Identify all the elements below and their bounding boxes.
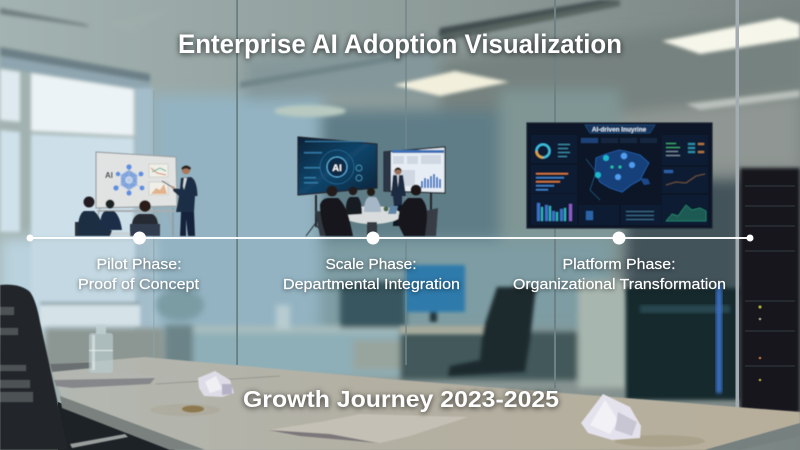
crumbs on table bbox=[150, 404, 220, 416]
table top bbox=[50, 357, 800, 450]
back room furniture bbox=[45, 280, 626, 388]
standing presenter bbox=[391, 167, 406, 226]
timeline bbox=[26, 232, 754, 244]
timeline line bbox=[30, 237, 750, 239]
phase illustration: pilot phase whiteboard presentation bbox=[75, 152, 198, 236]
milestone: platform bbox=[612, 232, 626, 244]
glass wall colour fields bbox=[0, 10, 800, 348]
dashboard bars bbox=[421, 174, 441, 188]
dashboard header bbox=[585, 125, 655, 134]
title: Enterprise AI Adoption Visualization bbox=[178, 29, 622, 59]
floor under table bbox=[58, 402, 175, 450]
crumpled paper right bbox=[581, 394, 705, 447]
phase illustration: scale phase meeting room bbox=[298, 137, 445, 236]
audience bbox=[75, 196, 160, 236]
presenter bbox=[162, 166, 198, 236]
whiteboard: AI bbox=[105, 171, 113, 180]
AI hub diagram bbox=[113, 164, 144, 196]
table front edge bbox=[60, 396, 205, 450]
label: platform phase bbox=[513, 256, 726, 293]
right dashboard screen bbox=[384, 147, 445, 227]
server racks bbox=[626, 168, 800, 413]
footer title: Growth Journey 2023-2025 bbox=[243, 386, 559, 412]
label: pilot phase: Proof of Concept bbox=[78, 276, 200, 293]
left AI screen bbox=[298, 137, 377, 236]
glass bottle bbox=[89, 325, 113, 373]
dashboard central map bbox=[579, 138, 661, 225]
milestone: pilot bbox=[133, 232, 146, 244]
dashboard header: AI-driven Inuyrine bbox=[592, 126, 647, 134]
office chair bbox=[0, 285, 128, 450]
paper sheets bbox=[268, 414, 468, 443]
label: pilot phase: Pilot Phase: bbox=[96, 256, 182, 273]
label: scale phase bbox=[283, 256, 460, 293]
dashboard left panels bbox=[531, 135, 577, 225]
seated people bbox=[327, 186, 337, 196]
dashboard screen frame bbox=[527, 123, 712, 228]
start dot bbox=[26, 234, 34, 242]
conference table foreground bbox=[0, 285, 800, 450]
label: scale phase: Scale Phase: bbox=[326, 256, 416, 273]
milestone: scale bbox=[366, 232, 380, 244]
board charts bbox=[149, 164, 168, 195]
conference table and team bbox=[315, 185, 438, 236]
end dot bbox=[746, 234, 754, 242]
crumpled paper left bbox=[198, 371, 234, 397]
laptop and notebook bbox=[50, 362, 280, 388]
label: scale phase: Departmental Integration bbox=[283, 276, 460, 293]
ceiling lights bbox=[0, 8, 800, 117]
ceiling beam lines bbox=[0, 0, 620, 92]
label: platform phase: Platform Phase: bbox=[562, 256, 676, 273]
left AI screen: AI bbox=[332, 163, 342, 174]
glass partition frames bbox=[153, 0, 739, 408]
window panes bbox=[0, 69, 153, 338]
dashboard right panels bbox=[662, 135, 708, 225]
label: pilot phase bbox=[78, 256, 200, 293]
phase illustration: platform phase AI dashboard bbox=[527, 123, 712, 228]
label: platform phase: Organizational Transformation bbox=[513, 276, 726, 293]
